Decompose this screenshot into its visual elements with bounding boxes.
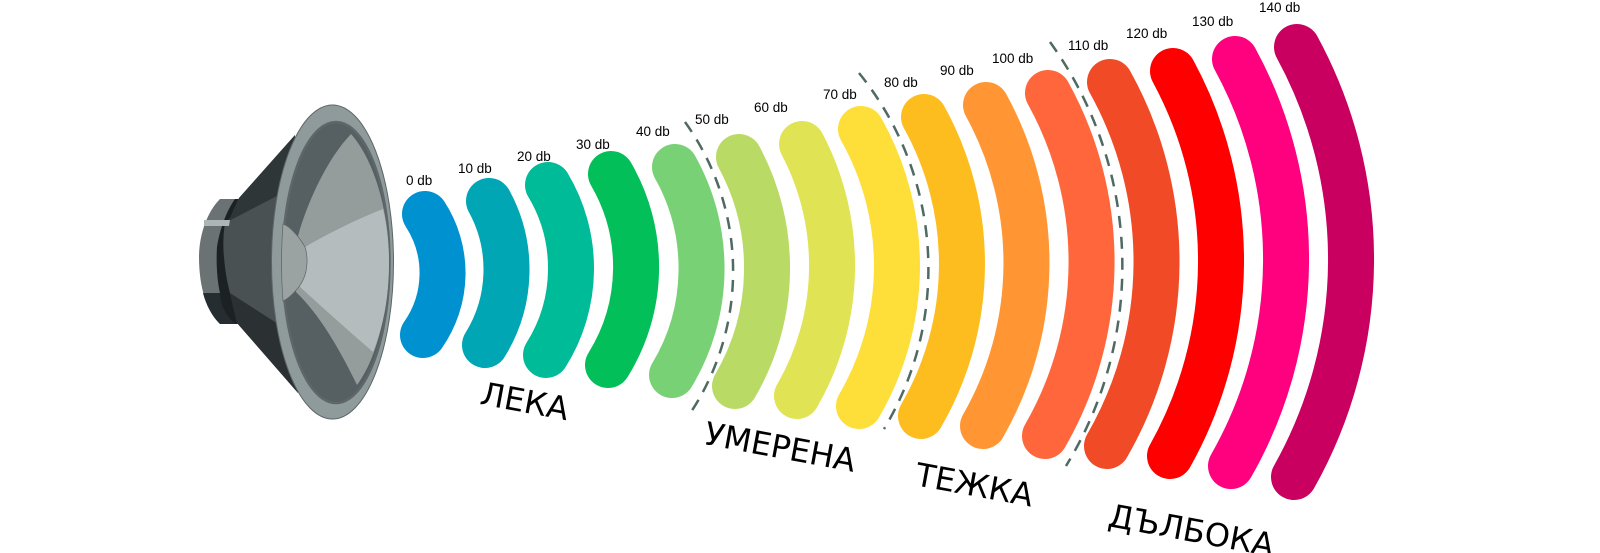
decibel labels: 70 db <box>823 87 857 102</box>
divider: light / moderate <box>685 122 733 415</box>
decibel labels: 110 db <box>1068 38 1108 53</box>
icon: loudspeaker <box>199 105 394 419</box>
band: 50 db <box>735 157 767 386</box>
band: 120 db <box>1170 71 1221 456</box>
band: 60 db <box>797 144 832 396</box>
decibel labels <box>406 0 1300 188</box>
decibel labels: 0 db <box>406 173 432 188</box>
decibel labels: 140 db <box>1259 0 1300 15</box>
decibel labels: 120 db <box>1126 26 1167 41</box>
band: 20 db <box>546 185 571 355</box>
divider: moderate / severe <box>859 73 928 429</box>
band: 40 db <box>672 167 702 375</box>
band: 100 db <box>1045 93 1092 436</box>
band: 30 db <box>608 174 636 365</box>
band: 140 db <box>1294 47 1351 477</box>
decibel labels: 30 db <box>576 137 610 152</box>
decibel labels: 40 db <box>636 124 670 139</box>
band: 80 db <box>921 117 962 416</box>
category: severe: ТЕЖКА <box>912 455 1036 515</box>
decibel labels: 50 db <box>695 112 729 127</box>
band: 110 db <box>1107 82 1157 446</box>
band: 0 db <box>423 214 443 335</box>
divider: severe / profound <box>1050 42 1122 466</box>
category: moderate: УМЕРЕНА <box>702 415 859 480</box>
decibel labels: 20 db <box>517 149 551 164</box>
decibel labels: 10 db <box>458 161 492 176</box>
decibel labels: 80 db <box>884 75 918 90</box>
category: light: ЛЕКА <box>478 375 572 428</box>
band: 90 db <box>983 105 1026 426</box>
decibel labels: 90 db <box>940 63 974 78</box>
decibel labels: 130 db <box>1192 14 1233 29</box>
band: 130 db <box>1231 59 1286 466</box>
band: 70 db <box>859 129 897 406</box>
band: 10 db <box>485 201 507 345</box>
decibel labels: 100 db <box>992 51 1033 66</box>
decibel labels: 60 db <box>754 100 788 115</box>
